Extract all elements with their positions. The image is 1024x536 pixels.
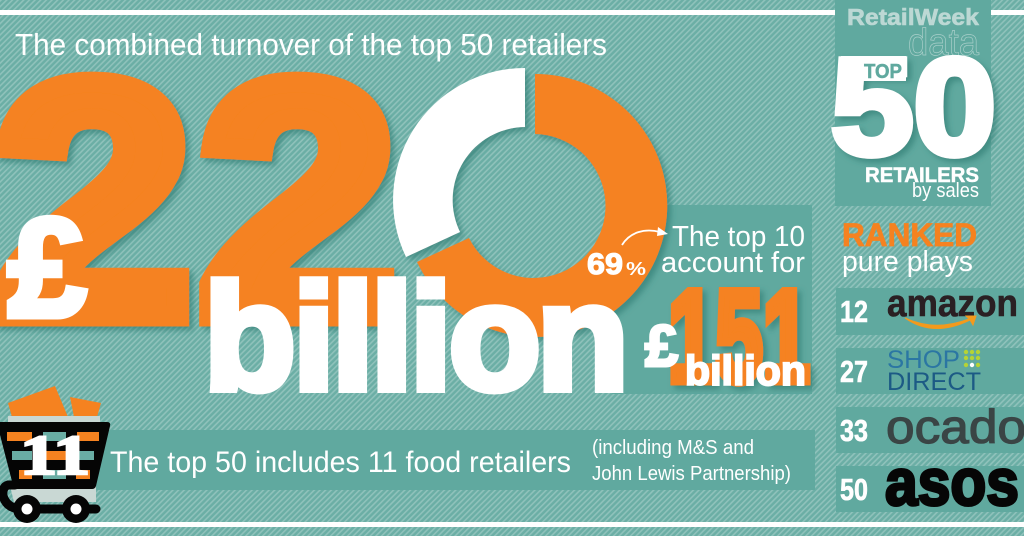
callout: 69 percent: 69 <box>587 248 623 281</box>
big number: 22: 2 <box>198 13 397 387</box>
arrow: 69 percent to top 10 <box>622 227 668 245</box>
text: food retailers note: John Lewis Partnership) <box>592 463 791 485</box>
icon: shop direct dots <box>964 350 980 367</box>
donut chart: 69 percent <box>393 68 667 337</box>
logo: shop direct <box>887 346 981 396</box>
figure: 151 billion: billion <box>685 347 806 394</box>
panel: top 10 <box>612 205 812 394</box>
row: asos: 50 <box>840 472 868 507</box>
text: food retailers note: (including M&S and <box>592 437 754 459</box>
logo: shop direct: SHOP <box>887 346 960 374</box>
text: retailers: RETAILERS <box>865 164 979 187</box>
row: shop direct: 27 <box>840 354 868 389</box>
logo: Retail Week: RetailWeek <box>847 4 979 30</box>
pound sign: £ <box>8 189 86 346</box>
figure: 151 billion: £ <box>645 314 678 379</box>
row: shop direct <box>836 346 1024 396</box>
text: top 10 account for: account for <box>661 247 805 279</box>
logo: shop direct: DIRECT <box>887 368 981 396</box>
row: amazon: 12 <box>840 294 868 329</box>
row: ocado: 33 <box>840 413 868 448</box>
text: top 10 account for: The top 10 <box>672 221 805 253</box>
figure: 151 billion: 151 <box>668 263 810 409</box>
icon: shopping cart <box>0 386 110 523</box>
row: amazon <box>836 283 1024 335</box>
big number: 22 <box>0 13 397 387</box>
callout: 69 percent: % <box>626 259 646 279</box>
donut segment: remainder <box>393 68 525 257</box>
figure: 151 billion <box>645 263 810 409</box>
row: asos <box>836 445 1024 519</box>
icon: amazon smile <box>905 316 976 329</box>
icon: shopping cart: 11 <box>20 425 90 487</box>
heading: pure plays: pure plays <box>842 246 973 278</box>
heading: combined turnover: The combined turnover of the top 50 retailers <box>15 27 607 62</box>
label: top: TOP <box>864 61 902 83</box>
text: food retailers note <box>592 437 791 485</box>
text: by sales: by sales <box>912 180 979 202</box>
text: top 10 account for <box>661 221 805 279</box>
label: top <box>841 56 906 83</box>
word: billion: billion <box>204 253 629 421</box>
donut segment: top 10 share <box>417 74 667 337</box>
text: food retailers: The top 50 includes 11 food retailers <box>110 446 571 479</box>
heading: ranked: RANKED <box>842 217 977 253</box>
callout: 69 percent <box>587 248 646 281</box>
text: data: data <box>908 22 980 64</box>
row: ocado <box>836 400 1024 453</box>
logo: ocado: ocado <box>886 400 1024 453</box>
number: 50: 50 <box>831 31 996 184</box>
panel: Retail Week logo <box>831 0 996 206</box>
panel: food retailers <box>96 430 815 490</box>
